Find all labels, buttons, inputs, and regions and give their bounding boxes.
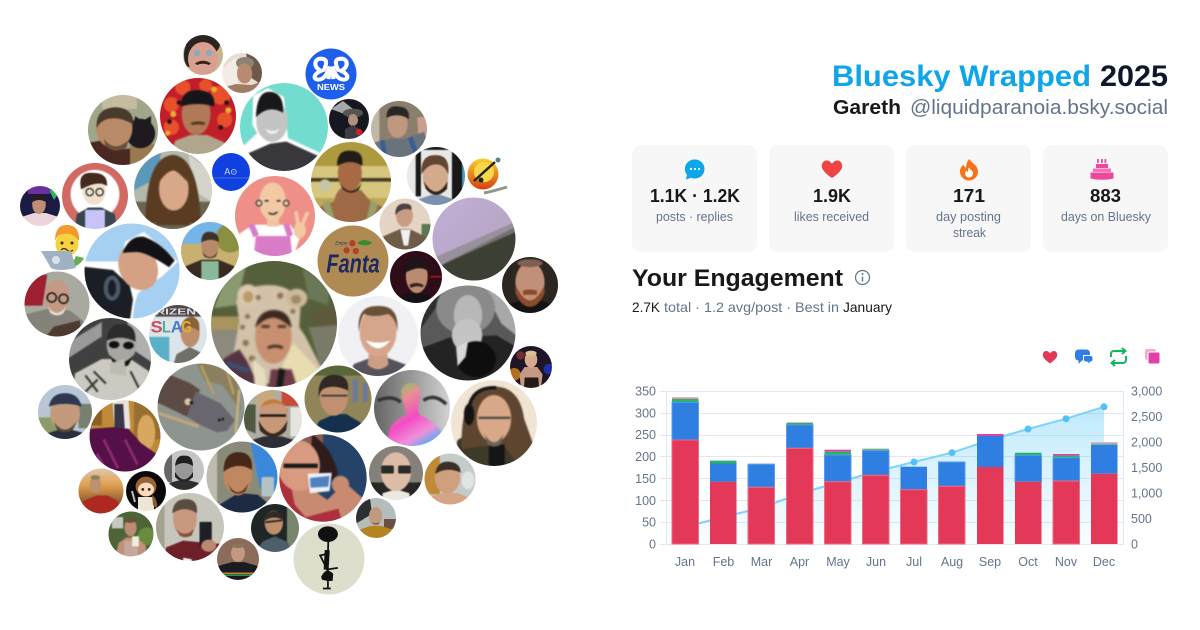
avatar: man with purple lights [20,186,60,226]
left axis labels: 200 [635,450,656,464]
x axis labels: Sep [979,555,1001,569]
right axis labels: 0 [1131,538,1138,552]
bar: Nov [1053,454,1080,544]
icon: speech bubble [685,159,704,180]
bar: Apr [786,422,813,544]
icon: birthday cake [1090,159,1114,180]
avatar: fireball clock [468,158,507,193]
bar: Jun [862,448,889,544]
user name and handle: Gareth [833,97,901,119]
panel: day posting streak: streak [953,226,987,240]
avatar: black and white bearded man [158,444,210,496]
avatar: man with trees and sky [181,222,239,280]
avatar: man on pillow [222,53,262,93]
right axis labels [1131,384,1162,552]
left axis labels: 350 [635,384,656,398]
avatar: man with bare shoulders [424,454,476,504]
panel: likes received [769,145,894,252]
avatar: long-haired man with headphones [451,380,537,466]
icon: info [856,270,870,284]
user name and handle: @liquidparanoia.bsky.social [910,97,1168,119]
right axis labels: 3,000 [1131,384,1162,398]
avatar: man with red flowers [160,78,236,154]
bar: Dec [1091,442,1118,544]
avatar: silhouette over grey face [374,370,450,446]
right axis labels: 1,000 [1131,486,1162,500]
bar: Aug [938,462,965,544]
cumulative area and line [685,403,1108,544]
chart: monthly engagement [635,384,1162,569]
avatar: mirror selfie in plaid [146,483,234,571]
bar: Oct [1015,453,1042,544]
avatar: moustached man [183,35,223,75]
panel: likes received: likes received [794,210,869,224]
engagement summary: January [843,299,892,315]
bar: Sep [977,434,1004,544]
avatar: red-bearded man [502,257,558,313]
x axis labels: Feb [713,555,734,569]
left axis labels: 150 [635,472,656,486]
right axis labels: 500 [1131,512,1152,526]
avatar: man in leopard hat [211,261,337,387]
avatar: bald man with glasses and cat [24,272,90,336]
title: 2025 [1100,60,1168,93]
avatar: bearded man on white [407,147,465,205]
x axis labels: May [826,555,851,569]
avatar: man in glasses on beach [304,366,372,432]
panel: days on Bluesky: days on Bluesky [1061,210,1152,224]
avatar: man with glass, blue sky [196,431,288,523]
bar: Jan [672,397,698,544]
x axis labels: Dec [1093,555,1115,569]
panel: posts and replies: posts · replies [656,210,733,224]
x axis labels: Jan [675,555,695,569]
avatar: woman sipping tea [279,434,367,522]
avatar: long-haired man [134,151,212,229]
avatar: black figure on cream [290,520,368,598]
panel: day posting streak [906,145,1031,252]
avatar: black and white man in sunglasses [69,318,151,400]
avatar: misty hillside [432,198,516,280]
right axis labels: 2,500 [1131,410,1162,424]
stacked bars [672,397,1118,544]
icon: repost legend [1111,348,1126,366]
left axis labels [635,384,656,552]
avatar: man with moustache, red light [390,251,442,303]
avatar: man in black cap on light blue [84,224,180,318]
avatar: grey bearded man with cat [420,286,516,380]
legend [1043,348,1160,366]
avatar: blue AO logo [212,153,250,191]
engagement summary: 2.7K [632,299,661,315]
panel: day posting streak: 171 [953,185,985,206]
avatar: anime chef girl [120,465,172,517]
panel: days on Bluesky: 883 [1090,185,1121,206]
chart grid [660,391,1124,544]
avatar: man in navy cap [38,385,92,439]
avatar: ABC News logo [306,48,356,100]
x axis labels: Apr [790,555,809,569]
panel: posts and replies [632,145,757,252]
bar: Mar [748,463,774,544]
icon: heart [822,160,842,178]
avatar: worried emoji with laptop [41,225,84,270]
left axis labels: 50 [642,516,656,530]
title: Bluesky Wrapped [832,60,1091,93]
avatar: man in black corset [510,346,552,388]
left axis labels: 0 [649,538,656,552]
avatar: cartoon man in red ring [62,163,128,229]
avatar: cartoon bald man in pink overalls [235,176,315,256]
icon: flame [960,159,978,180]
avatar: dark hatted figure [329,99,369,139]
panel: day posting streak: day posting [936,210,1001,224]
left axis labels: 300 [635,406,656,420]
panel: days on Bluesky [1043,145,1168,252]
bar: May [824,450,851,544]
heading: your engagement: Your Engagement [632,265,843,292]
engagement summary [632,299,892,315]
avatar: man in rainbow shirt [211,532,265,586]
avatar: bald man in mustard sweater [350,492,402,544]
avatar: man in patterned shirt [244,497,306,559]
left axis labels: 100 [635,494,656,508]
avatar: platypus [158,364,244,450]
x axis labels: Jun [866,555,886,569]
x axis labels: Nov [1055,555,1078,569]
avatar cluster [14,29,566,598]
x axis labels: Mar [751,555,772,569]
icon: quote legend [1145,349,1160,364]
x axis labels: Jul [906,555,922,569]
engagement summary: total · 1.2 avg/post · Best in [664,299,839,315]
avatar: man with black cat [88,95,158,165]
avatar: bald man in black glasses [369,446,423,500]
icon: replies legend [1075,350,1093,364]
x axis labels [675,555,1115,569]
avatar: teal sticker man [240,83,328,171]
avatar: smiling bearded man with glasses [244,390,302,448]
avatar: man with SLAG letters [149,305,207,363]
right axis labels: 2,000 [1131,436,1162,450]
x axis labels: Oct [1018,555,1038,569]
right axis labels: 1,500 [1131,461,1162,475]
avatar: Fanta logo [318,226,388,296]
bar: Feb [710,460,736,544]
avatar: purple ball gown [90,400,160,472]
panel: posts and replies: 1.1K · 1.2K [650,185,741,206]
avatar: shirtless man in singlet [311,142,391,222]
bar: Jul [900,467,927,544]
avatar: man at sunset in red jacket [72,462,130,520]
avatar: man with tarot card [102,505,160,563]
avatar: man in suit [380,198,430,250]
icon: heart legend [1043,351,1057,363]
avatar: smiling man on white [338,296,418,376]
avatar: man with blue straps [371,101,427,157]
x axis labels: Aug [941,555,963,569]
left axis labels: 250 [635,428,656,442]
panel: likes received: 1.9K [813,185,852,206]
